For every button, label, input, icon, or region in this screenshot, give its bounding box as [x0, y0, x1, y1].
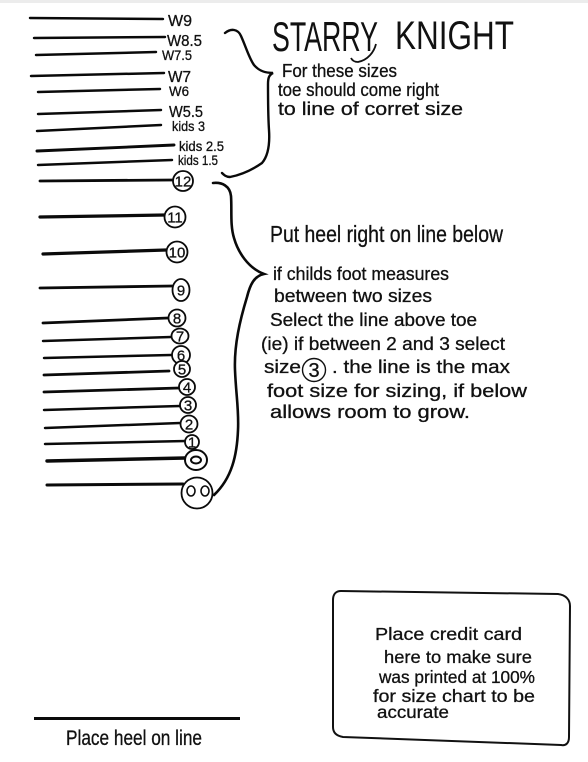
size 3 [44, 397, 196, 414]
note: toe sizes: toe should come right [278, 80, 439, 100]
size 3: 3 [184, 398, 192, 414]
size 00 [47, 478, 212, 508]
size 8: 8 [173, 310, 181, 328]
size kids 3 [37, 118, 205, 134]
size 8 [43, 310, 186, 328]
size kids 2.5: kids 2.5 [179, 138, 224, 154]
size W5.5 [38, 104, 203, 121]
instructions for sizing: if childs foot measures [273, 264, 449, 284]
title: KNIGHT [395, 14, 514, 58]
size kids 2.5 [37, 138, 224, 154]
lower curly brace [213, 183, 264, 495]
size kids 3: kids 3 [172, 118, 205, 134]
size 5 [44, 361, 190, 378]
size 12: 12 [175, 174, 191, 190]
credit card instruction text: was printed at 100% [378, 667, 535, 687]
credit card instruction text: Place credit card [375, 624, 522, 644]
size 1: 1 [188, 434, 196, 452]
instructions for sizing: . the line is the max [332, 357, 510, 377]
credit card instruction text: for size chart to be [373, 686, 535, 706]
size W7.5 [36, 47, 192, 63]
size 2 [45, 416, 198, 434]
numbered child size lines [40, 171, 212, 508]
credit card instruction text [373, 624, 535, 722]
size 11 [40, 206, 186, 228]
size W9: W9 [168, 13, 192, 30]
title [272, 13, 514, 62]
instructions for sizing: size [264, 357, 301, 377]
instructions for sizing: allows room to grow. [270, 402, 470, 422]
size 7: 7 [176, 328, 184, 346]
size 9 [40, 279, 190, 301]
instructions for sizing: between two sizes [274, 286, 432, 306]
size 11: 11 [167, 210, 183, 226]
size 0 [47, 450, 207, 470]
size 6 [44, 346, 190, 364]
size W8.5: W8.5 [167, 33, 202, 50]
heel baseline [34, 717, 240, 720]
size 4: 4 [183, 380, 191, 396]
upper curly brace [222, 30, 273, 177]
instructions for sizing: (ie) if between 2 and 3 select [261, 334, 505, 354]
size 10: 10 [169, 244, 185, 262]
instructions for sizing [261, 264, 528, 422]
size 2: 2 [185, 416, 193, 434]
credit card instruction text: accurate [377, 702, 449, 722]
size W7: W7 [168, 69, 191, 86]
credit card instruction text: here to make sure [384, 647, 532, 667]
credit card box [333, 591, 570, 745]
instructions for sizing: Select the line above toe [270, 310, 477, 330]
instructions for sizing: 3 [308, 360, 320, 382]
size W6 [38, 83, 189, 99]
size W7 [31, 69, 191, 86]
heading: put heel on line: Put heel right on line below [270, 221, 503, 247]
size 4 [44, 379, 195, 396]
heel line label: Place heel on line [66, 727, 202, 750]
size kids 1.5 [38, 152, 218, 168]
size W7.5: W7.5 [162, 47, 192, 63]
size 9: 9 [177, 282, 185, 300]
size 6: 6 [177, 348, 185, 364]
size 1 [45, 434, 199, 452]
size 10 [43, 242, 188, 262]
size 5: 5 [178, 362, 186, 378]
title: STARRY [272, 13, 378, 60]
size kids 1.5: kids 1.5 [178, 152, 218, 168]
instructions for sizing: foot size for sizing, if below [267, 381, 528, 401]
size W5.5: W5.5 [169, 104, 203, 121]
note: toe sizes: For these sizes [282, 61, 397, 81]
width and kids size lines [30, 13, 224, 168]
size 12 [40, 171, 193, 191]
note: toe sizes: to line of corret size [278, 99, 463, 119]
size W6: W6 [169, 83, 189, 99]
size 7 [43, 328, 188, 346]
note: toe sizes [278, 61, 463, 119]
